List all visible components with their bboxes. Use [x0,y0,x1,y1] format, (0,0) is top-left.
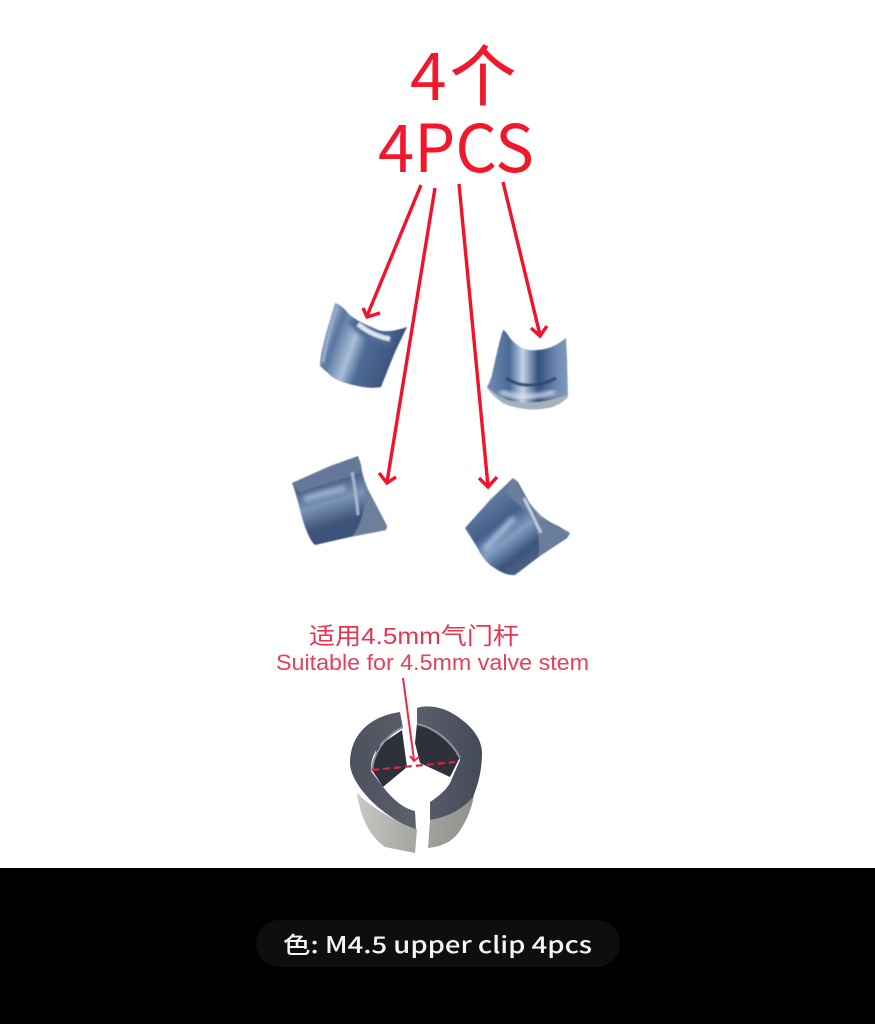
valve clip: top left [320,303,407,388]
title: quantity: 4 [410,24,447,120]
fit arrow [403,678,419,761]
ring clip assembly with diameter mark [350,678,482,853]
title: quantity: 4PCS [378,96,534,192]
arrow: to top-right clip [503,182,547,336]
valve clip: bottom left [292,456,390,545]
title: quantity: 个 [450,24,516,120]
callout: English fit label: Suitable for 4.5mm valve stem [276,650,589,675]
arrow: to bottom-right clip [459,184,497,487]
arrow: to top-left clip [363,185,421,317]
title: quantity [378,24,534,192]
diameter dashed line [372,762,455,770]
variant label: 色: M4.5 upper clip 4pcs [283,926,592,960]
valve clip: top right [487,330,568,412]
callout: Chinese fit label: 适用4.5mm气门杆 [309,623,519,649]
black footer band [0,868,875,1024]
variant pill [256,920,620,967]
valve clip: bottom right [465,478,572,575]
arrow: to bottom-left clip [379,188,435,483]
